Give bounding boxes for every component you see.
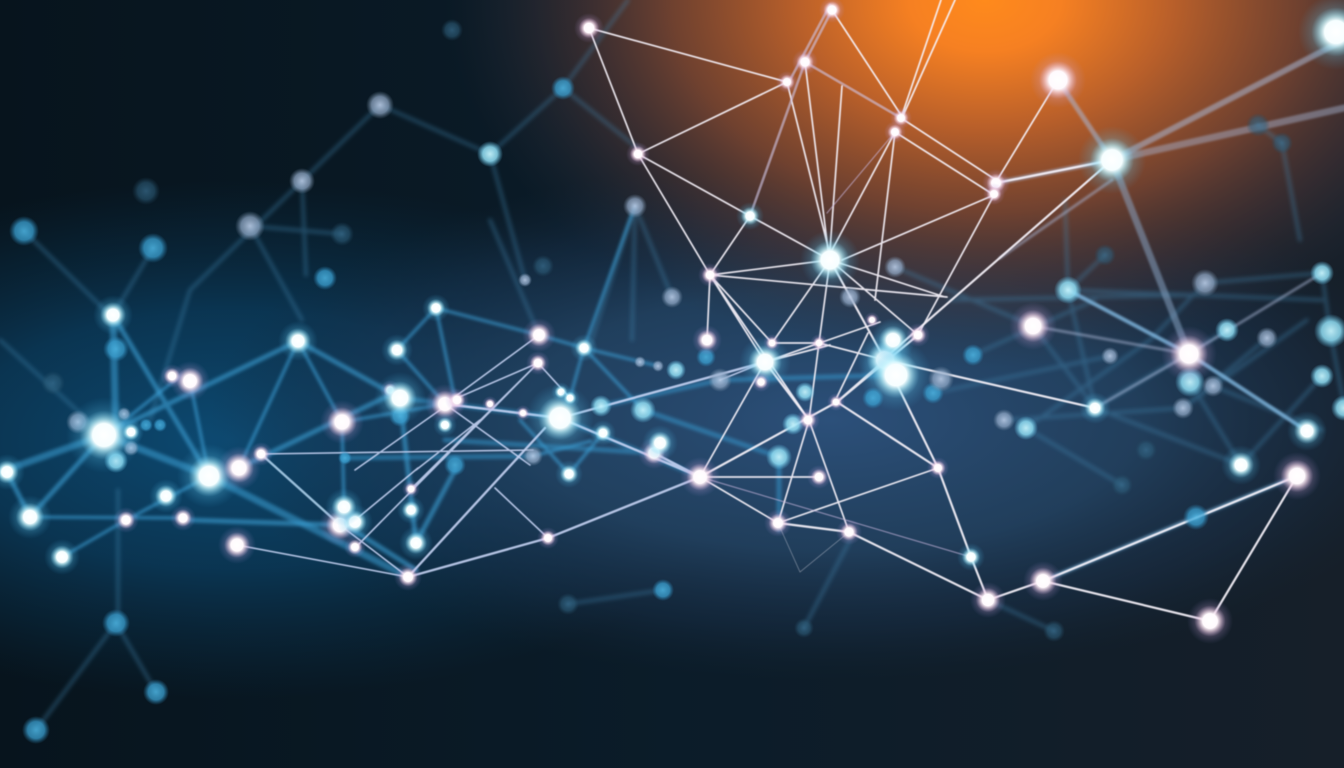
thick glowing blue links, left and centre clusters bbox=[0, 206, 895, 577]
bright nodes, central web bbox=[574, 0, 1010, 618]
bright nodes, right cluster bbox=[1009, 0, 1344, 644]
bright nodes, left cluster bbox=[0, 295, 373, 575]
pale lavender links, centre-left bbox=[237, 335, 765, 577]
thick faded links, right cluster bbox=[996, 40, 1344, 581]
sharp pale links, central web bbox=[589, 0, 1297, 621]
bright nodes, centre-left cluster bbox=[374, 294, 720, 591]
